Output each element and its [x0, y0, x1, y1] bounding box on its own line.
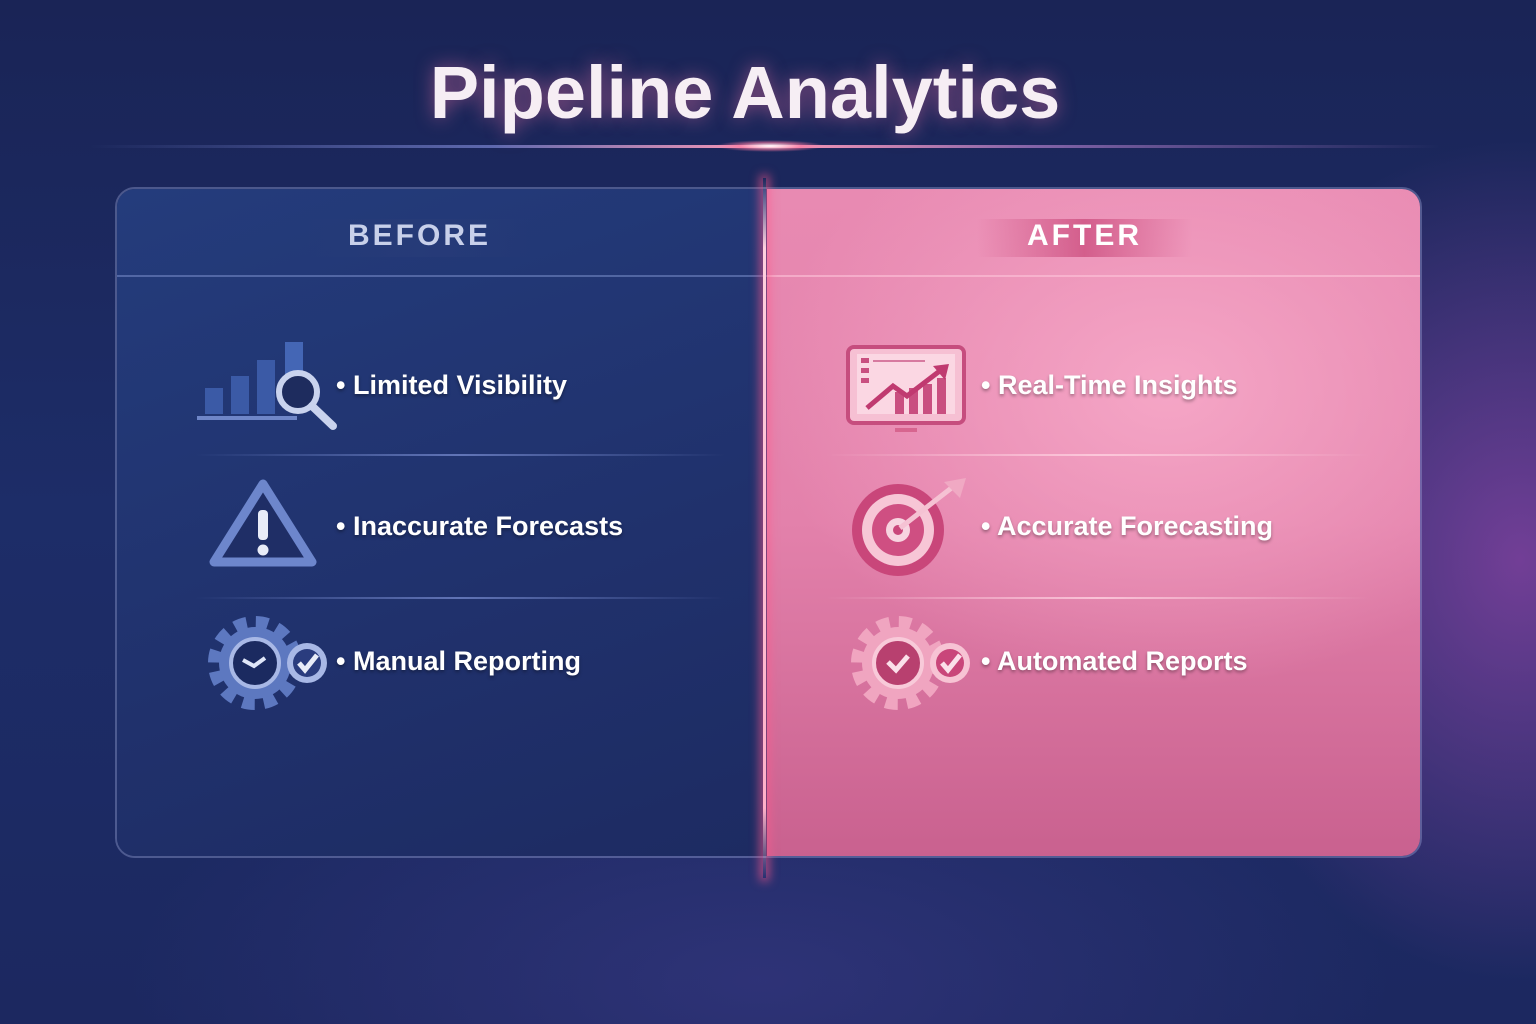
- text: accurate forecasting: • Accurate Forecasting: [981, 511, 1273, 541]
- heading: after: AFTER: [1027, 219, 1142, 252]
- panel: before: [117, 189, 767, 856]
- panel: comparison: [115, 187, 1422, 858]
- text: real-time insights: • Real-Time Insights: [981, 370, 1238, 400]
- heading: after: [977, 219, 1192, 257]
- icon: monitor with growth chart: [846, 345, 966, 432]
- icon: target with arrow: [852, 478, 966, 576]
- icon: warning triangle: [210, 480, 316, 566]
- text: inaccurate forecasts: • Inaccurate Forecasts: [336, 511, 623, 541]
- icon: gear with clock and check: [208, 616, 327, 710]
- panel: after: [767, 189, 1424, 856]
- heading: before: [307, 219, 532, 257]
- divider glow: [763, 178, 766, 878]
- icon: gear with checks: [851, 616, 970, 710]
- text: automated reports: • Automated Reports: [981, 646, 1247, 676]
- heading: before: BEFORE: [348, 219, 491, 252]
- text: manual reporting: • Manual Reporting: [336, 646, 581, 676]
- icon: bar chart with magnifier: [197, 342, 337, 430]
- title: Pipeline Analytics: [430, 51, 1060, 134]
- text: limited visibility: • Limited Visibility: [336, 370, 567, 400]
